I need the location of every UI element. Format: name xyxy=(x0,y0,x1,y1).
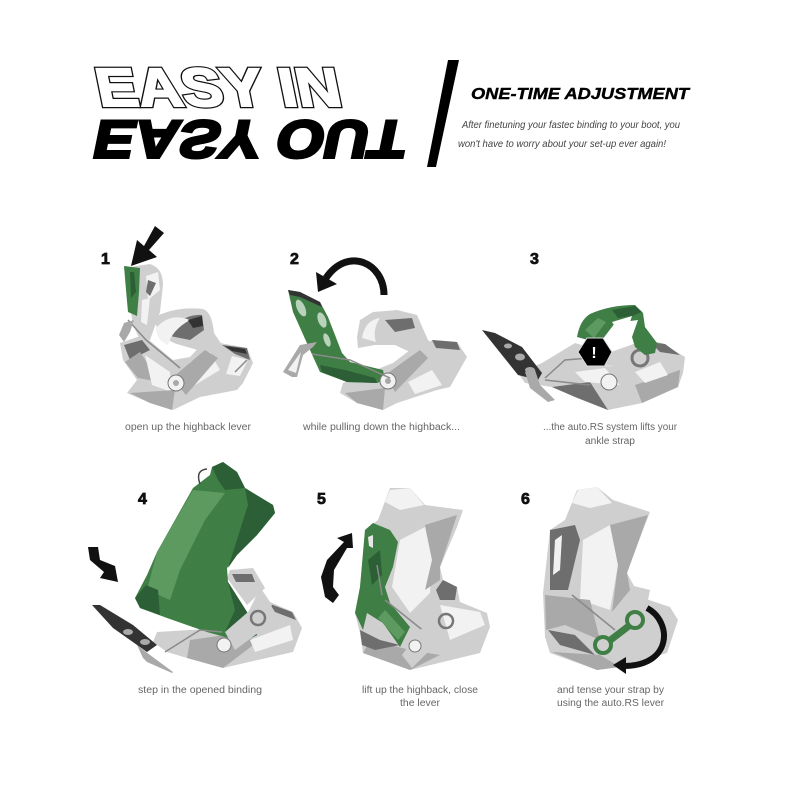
flat highback xyxy=(92,605,157,652)
icon: diagonal arrow xyxy=(88,547,118,582)
step number 6: 6 xyxy=(521,491,530,508)
binding illustration 1 xyxy=(119,264,253,410)
caption: open up the highback lever xyxy=(125,422,252,433)
subheading: ONE-TIME ADJUSTMENT xyxy=(471,86,691,103)
caption line 2: the lever xyxy=(400,698,441,709)
icon: curved up arrow xyxy=(321,533,353,603)
caption: step in the opened binding xyxy=(138,685,262,696)
binding illustration 2 xyxy=(283,290,467,410)
green highback xyxy=(288,290,385,383)
green lever xyxy=(124,266,140,316)
caption line 2: ankle strap xyxy=(585,436,635,447)
divider slash xyxy=(427,60,459,167)
icon: curved arrow xyxy=(613,608,664,674)
green lever xyxy=(595,612,643,653)
caption line 1: and tense your strap by xyxy=(557,685,664,696)
green ankle strap xyxy=(577,305,657,355)
step number 5: 5 xyxy=(317,491,326,508)
intro line 2: won't have to worry about your set-up ever again! xyxy=(458,138,666,150)
pulled lever xyxy=(283,342,317,377)
heading: EASY OUT flipped: EASY OUT xyxy=(89,109,413,168)
binding illustration 5 xyxy=(355,488,490,670)
intro line 1: After finetuning your fastec binding to your boot, you xyxy=(461,119,680,131)
panel: step 4 xyxy=(88,462,302,696)
grey boot xyxy=(543,487,678,670)
step number 4: 4 xyxy=(138,491,147,508)
flat highback xyxy=(482,330,542,380)
caption line 2: using the auto.RS lever xyxy=(557,698,665,709)
step number 2: 2 xyxy=(290,251,299,268)
grey boot xyxy=(355,488,490,670)
heading: EASY IN outlined: EASY IN xyxy=(90,57,346,118)
panel: step 2 xyxy=(283,251,467,433)
binding illustration 6 xyxy=(543,487,678,674)
binding illustration 3 xyxy=(482,305,685,410)
step number 1: 1 xyxy=(101,251,110,268)
icon: arrow pointing to lever xyxy=(131,226,164,266)
green highback xyxy=(355,523,410,647)
step number 3: 3 xyxy=(530,251,539,268)
icon: curved arrow xyxy=(316,261,384,295)
caption line 1: lift up the highback, close xyxy=(362,685,478,696)
title: easy in / easy out xyxy=(89,57,413,168)
panel: step 3 xyxy=(482,251,685,447)
exclamation mark: ! xyxy=(591,345,597,362)
green boot xyxy=(135,462,275,642)
caption: while pulling down the highback... xyxy=(302,422,460,433)
intro text block xyxy=(458,86,691,150)
caption line 1: ...the auto.RS system lifts your xyxy=(543,422,678,433)
heading: EASY IN outlined: EASY IN xyxy=(90,57,346,118)
panel: step 1 xyxy=(101,226,253,433)
binding illustration 4 xyxy=(92,462,302,673)
icon: warning hexagon xyxy=(578,338,613,366)
panel: step 5 xyxy=(317,488,490,709)
panel: step 6 xyxy=(521,487,678,709)
